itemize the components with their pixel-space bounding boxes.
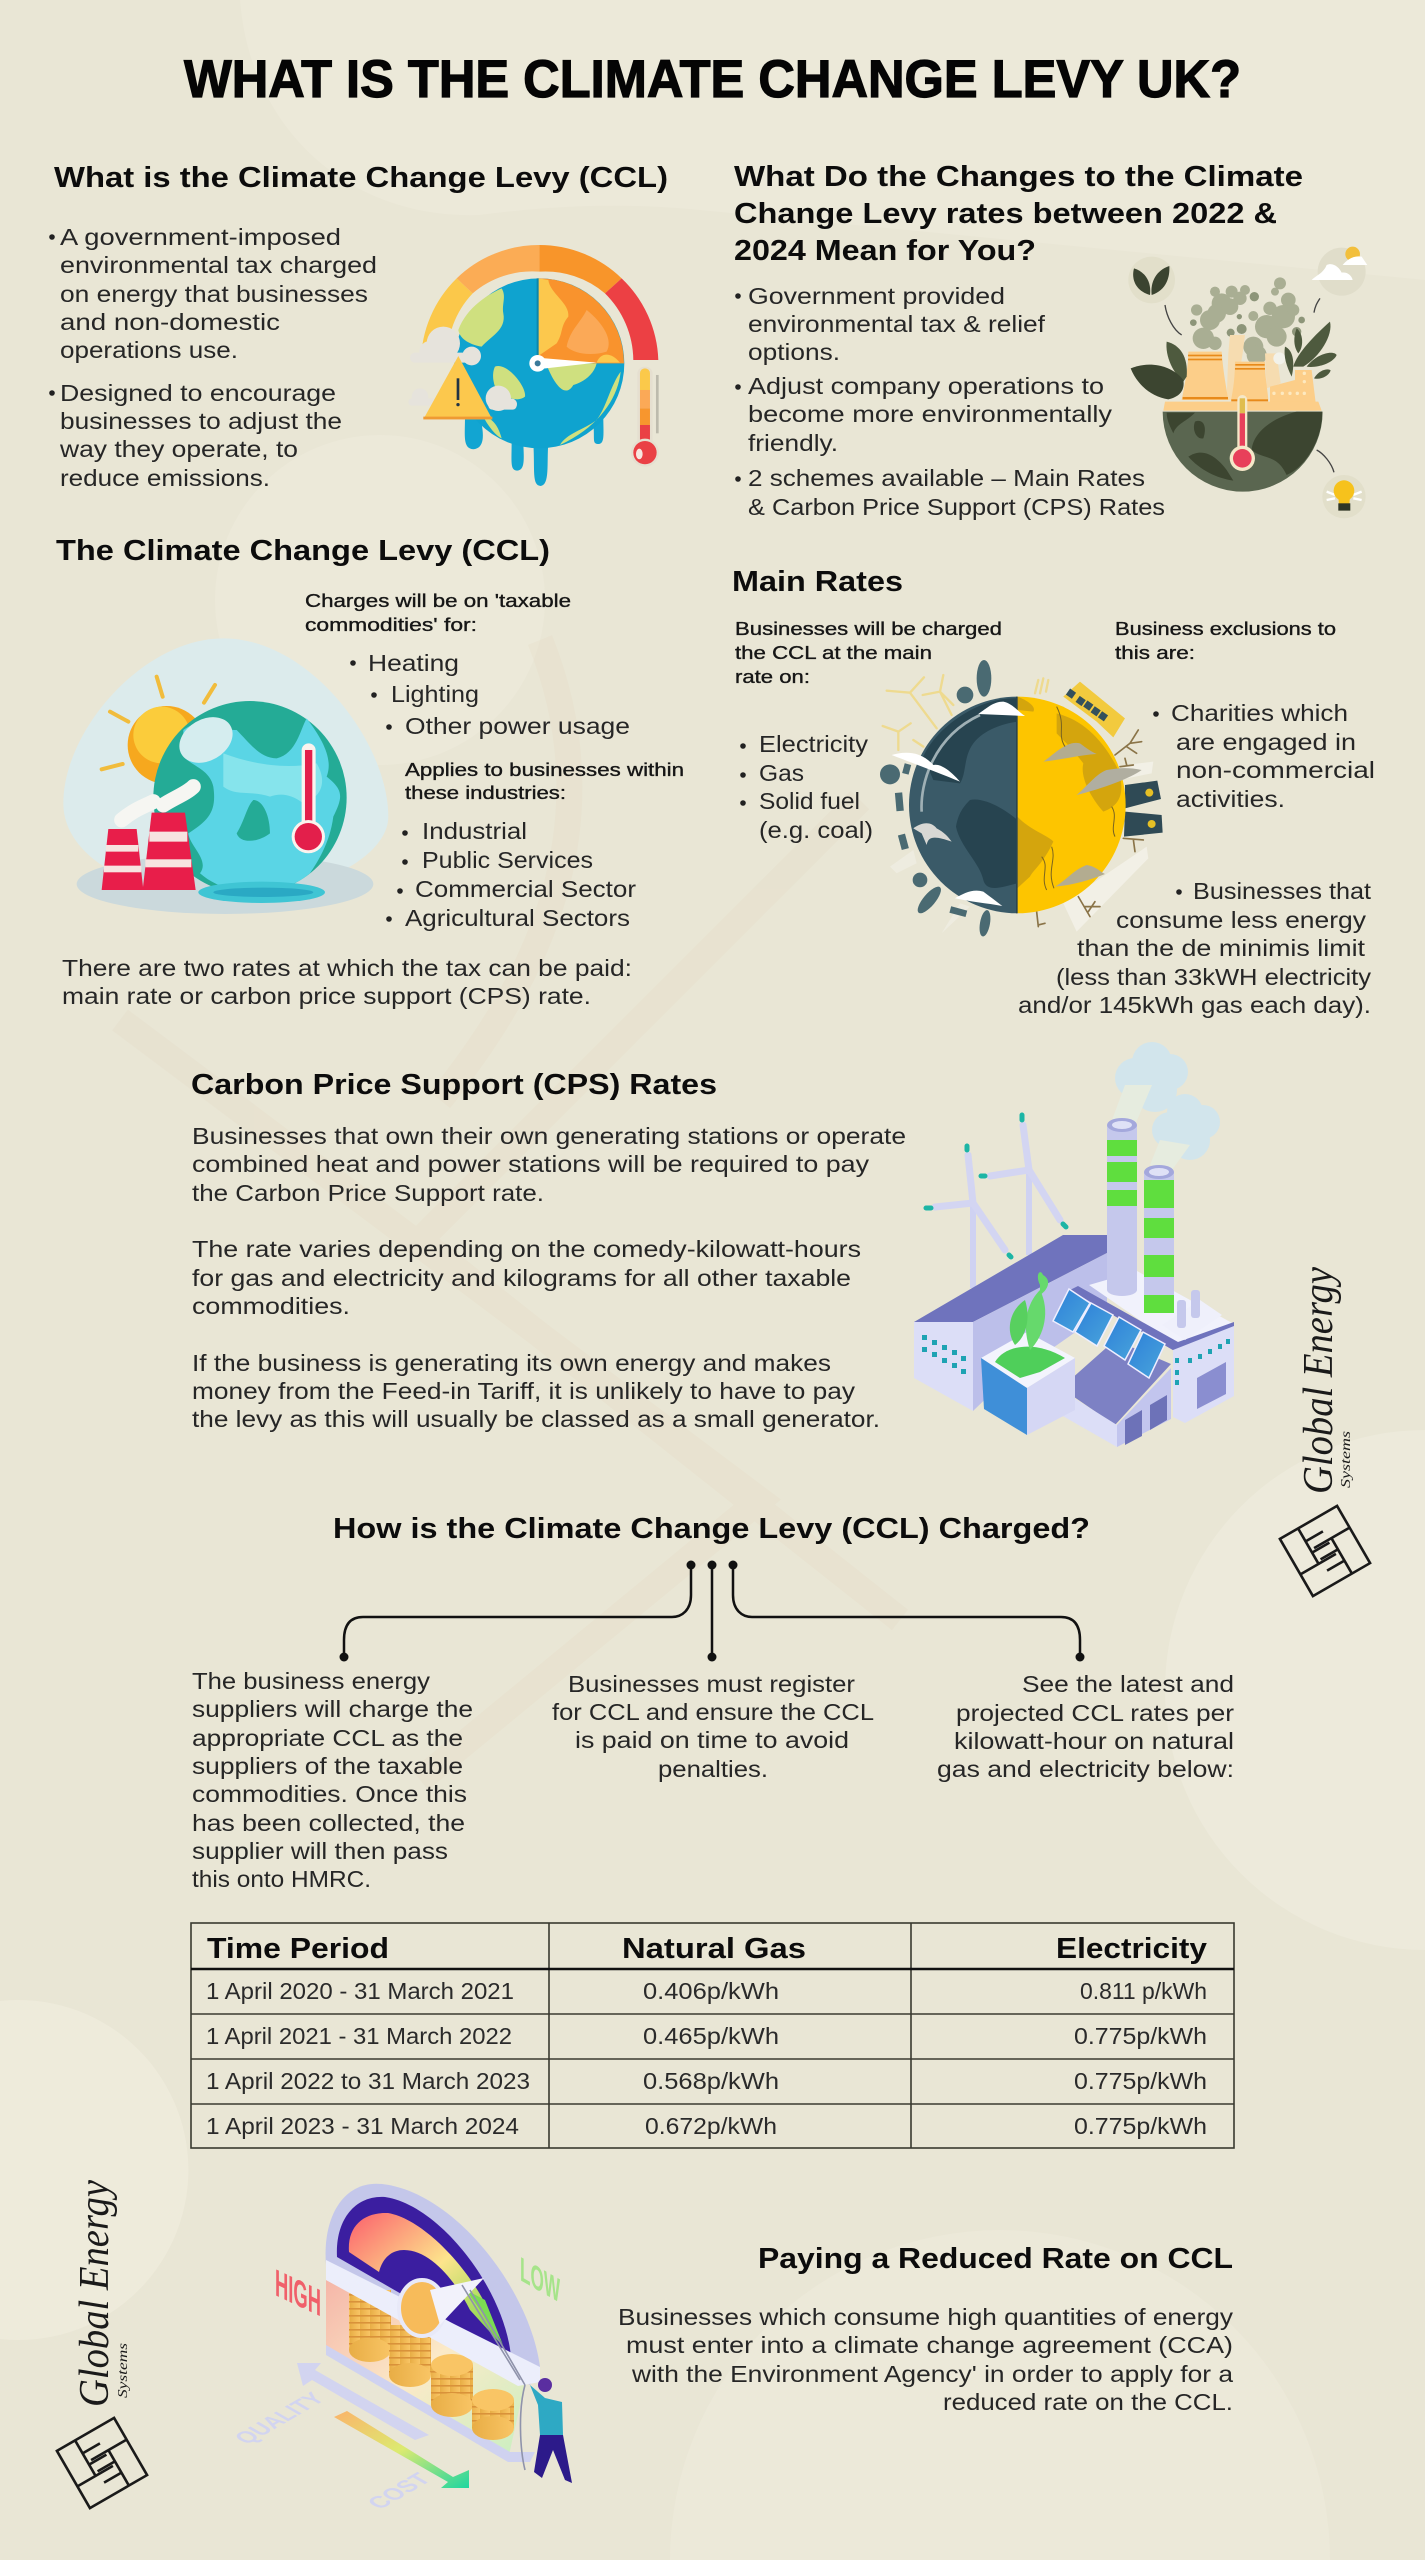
text block: CCL definition bullets: on energy that businesses <box>60 281 368 307</box>
text block: de minimis exclusion: than the de minimis limit <box>1077 935 1366 961</box>
text block: commodities list <box>350 650 630 739</box>
text block: register for CCL: for CCL and ensure the CCL <box>552 1699 874 1725</box>
text block: CPS paragraph one: the Carbon Price Support rate. <box>192 1180 544 1206</box>
text block: see rates below: gas and electricity below: <box>937 1756 1234 1782</box>
panel: carbon price support rates <box>191 1042 1234 1447</box>
icon: cost gauge with coin stacks: HIGH <box>275 2262 321 2325</box>
text block: see rates below: projected CCL rates per <box>956 1700 1234 1726</box>
text block: de minimis exclusion: Businesses that <box>1193 878 1372 904</box>
heading: what do the changes mean: What Do the Changes to the Climate <box>734 161 1303 193</box>
table row 2020-2021 <box>206 1978 1207 2004</box>
text block: CCL definition bullets: environmental tax charged <box>60 252 377 278</box>
text block: suppliers charge CCL: The business energy <box>192 1668 431 1694</box>
text block: taxable commodities subheading: Charges will be on 'taxable <box>305 591 571 611</box>
label: quality: QUALITY <box>229 2389 331 2448</box>
text block: de minimis exclusion <box>1018 878 1372 1018</box>
text block: suppliers charge CCL: has been collected, the <box>192 1810 465 1836</box>
text block: CPS paragraph two: The rate varies depending on the comedy-kilowatt-hours <box>192 1236 861 1262</box>
panel: main rates <box>732 566 1375 1018</box>
text block: CPS paragraph one: combined heat and power stations will be required to pay <box>192 1151 870 1177</box>
text block: charged at main rate on <box>735 619 1002 687</box>
heading: how is the CCL charged: How is the Climate Change Levy (CCL) Charged? <box>333 1513 1090 1545</box>
table header <box>207 1933 1207 1965</box>
text block: changes bullets: & Carbon Price Support (CPS) Rates <box>748 494 1165 520</box>
text block: CCL definition bullets <box>49 224 377 491</box>
text block: CCL definition bullets: reduce emissions. <box>60 465 270 491</box>
heading: what do the changes mean <box>734 161 1303 267</box>
text block: industries list: Public Services <box>422 847 593 873</box>
text block: CCL definition bullets: way they operate, to <box>59 436 298 462</box>
heading: paying a reduced rate: Paying a Reduced Rate on CCL <box>758 2243 1233 2275</box>
logo: right: Systems <box>1339 1430 1354 1488</box>
text block: charities exclusion: Charities which <box>1171 700 1348 726</box>
icon: power plant on half globe <box>1128 247 1367 518</box>
panel: the climate change levy <box>56 535 684 1009</box>
text block: commodities list: Other power usage <box>405 713 630 739</box>
logo: right <box>1280 1267 1370 1596</box>
logo: left: Global Energy <box>72 2180 118 2407</box>
text block: commodities list: Lighting <box>391 681 479 707</box>
heading: CPS rates: Carbon Price Support (CPS) Rates <box>191 1069 717 1101</box>
text block: climate change agreement: reduced rate on the CCL. <box>943 2389 1233 2415</box>
text block: suppliers charge CCL: suppliers of the taxable <box>192 1753 463 1779</box>
text block: de minimis exclusion: (less than 33kWH electricity <box>1056 964 1372 990</box>
text block: changes bullets: environmental tax & relief <box>748 311 1046 337</box>
text block: CPS paragraph three: If the business is generating its own energy and makes <box>192 1350 831 1376</box>
label: low: LOW <box>520 2249 560 2310</box>
text block: CCL definition bullets: A government-imposed <box>60 224 341 250</box>
text block: CPS paragraph one: Businesses that own their own generating stations or operate <box>192 1123 906 1149</box>
icon: melting globe gauge <box>408 245 659 486</box>
heading: the CCL: The Climate Change Levy (CCL) <box>56 535 550 567</box>
text block: suppliers charge CCL: commodities. Once this <box>192 1781 467 1807</box>
table header: Time Period <box>207 1933 389 1965</box>
text block: changes bullets <box>735 283 1165 520</box>
heading: what is the CCL: What is the Climate Change Levy (CCL) <box>54 162 668 194</box>
connector: three branching lines <box>340 1560 1084 1662</box>
table row 2022-2023 <box>206 2068 1207 2094</box>
table row 2020-2021: 0.406p/kWh <box>643 1978 779 2004</box>
panel: how is the CCL charged <box>192 1513 1234 1892</box>
text block: de minimis exclusion: and/or 145kWh gas each day). <box>1018 992 1371 1018</box>
text block: industries list: Industrial <box>422 818 527 844</box>
text block: suppliers charge CCL: supplier will then pass <box>192 1838 448 1864</box>
table header: Natural Gas <box>622 1933 806 1965</box>
text block: suppliers charge CCL: this onto HMRC. <box>192 1866 371 1892</box>
text block: exclusions subheading: Business exclusions to <box>1115 619 1336 639</box>
table header: Electricity <box>1056 1933 1207 1965</box>
icon: melting globe with sun and cooling towers <box>63 638 388 914</box>
text block: register for CCL: Businesses must register <box>568 1671 855 1697</box>
heading: what do the changes mean: 2024 Mean for You? <box>734 235 1036 267</box>
text block: taxable commodities subheading: commodities' for: <box>305 615 477 635</box>
text block: climate change agreement: with the Environment Agency' in order to apply for a <box>631 2361 1233 2387</box>
text block: charged at main rate on: the CCL at the main <box>735 643 932 663</box>
text block: taxable commodities subheading <box>305 591 571 635</box>
text block: fuels list: Electricity <box>759 731 869 757</box>
heading: main rates: Main Rates <box>732 566 903 598</box>
text block: CPS paragraph three: money from the Feed-in Tariff, it is unlikely to have to pay <box>192 1378 856 1404</box>
text block: industries list: Commercial Sector <box>415 876 636 902</box>
table: CCL rates <box>191 1923 1234 2148</box>
text block: CPS paragraph three: the levy as this will usually be classed as a small generator. <box>192 1406 880 1432</box>
text block: changes bullets: options. <box>748 339 840 365</box>
text block: charged at main rate on: Businesses will be charged <box>735 619 1002 639</box>
text block: CPS paragraph three <box>192 1350 880 1432</box>
panel: what is the CCL <box>49 162 668 491</box>
icon: isometric factory with wind turbines <box>914 1042 1234 1447</box>
text block: charities exclusion: activities. <box>1176 786 1285 812</box>
text block: register for CCL <box>552 1671 874 1782</box>
text block: changes bullets: Government provided <box>748 283 1005 309</box>
table row 2022-2023: 1 April 2022 to 31 March 2023 <box>206 2068 530 2094</box>
text block: fuels list <box>740 731 873 843</box>
table row 2021-2022: 1 April 2021 - 31 March 2022 <box>206 2023 512 2049</box>
text block: charities exclusion: are engaged in <box>1176 729 1356 755</box>
table row 2023-2024 <box>206 2113 1207 2139</box>
text block: CCL definition bullets: operations use. <box>60 337 238 363</box>
text block: CPS paragraph two <box>192 1236 861 1319</box>
table row 2023-2024: 1 April 2023 - 31 March 2024 <box>206 2113 519 2139</box>
text block: fuels list: Gas <box>759 760 804 786</box>
logo: left: Systems <box>116 2342 131 2398</box>
text block: industries list: Agricultural Sectors <box>405 905 630 931</box>
text block: climate change agreement: must enter into a climate change agreement (CCA) <box>626 2332 1233 2358</box>
text block: climate change agreement <box>618 2304 1234 2415</box>
table row 2020-2021: 0.811 p/kWh <box>1080 1978 1207 2004</box>
panel: changes to the rates <box>734 161 1367 520</box>
text block: suppliers charge CCL: appropriate CCL as the <box>192 1725 463 1751</box>
text block: see rates below <box>937 1671 1234 1782</box>
text block: industries subheading: these industries: <box>405 783 566 803</box>
text block: exclusions subheading: this are: <box>1115 643 1195 663</box>
text block: CPS paragraph two: commodities. <box>192 1293 350 1319</box>
text block: CCL definition bullets: Designed to encourage <box>60 380 336 406</box>
text block: charities exclusion <box>1153 700 1375 812</box>
text block: see rates below: See the latest and <box>1022 1671 1234 1697</box>
text block: see rates below: kilowatt-hour on natural <box>954 1728 1234 1754</box>
title: WHAT IS THE CLIMATE CHANGE LEVY UK? <box>184 50 1241 109</box>
text block: commodities list: Heating <box>368 650 459 676</box>
table row 2021-2022: 0.775p/kWh <box>1074 2023 1207 2049</box>
text block: changes bullets: Adjust company operations to <box>748 373 1104 399</box>
text block: register for CCL: penalties. <box>658 1756 768 1782</box>
table row 2023-2024: 0.672p/kWh <box>645 2113 777 2139</box>
label: cost: COST <box>362 2469 437 2513</box>
text block: CCL definition bullets: businesses to adjust the <box>60 408 342 434</box>
text block: charities exclusion: non-commercial <box>1176 757 1375 783</box>
text block: two rates note <box>62 955 632 1009</box>
text block: fuels list: (e.g. coal) <box>759 817 873 843</box>
text block: fuels list: Solid fuel <box>759 788 860 814</box>
text block: industries subheading: Applies to businesses within <box>405 760 684 780</box>
text block: charged at main rate on: rate on: <box>735 667 810 687</box>
text block: suppliers charge CCL: suppliers will charge the <box>192 1696 473 1722</box>
table row 2021-2022 <box>206 2023 1207 2049</box>
text block: changes bullets: become more environmentally <box>748 401 1113 427</box>
text block: two rates note: main rate or carbon price support (CPS) rate. <box>62 983 591 1009</box>
text block: suppliers charge CCL <box>192 1668 473 1892</box>
icon: cost gauge with coin stacks <box>229 2184 572 2513</box>
text block: climate change agreement: Businesses which consume high quantities of energy <box>618 2304 1234 2330</box>
text block: industries subheading <box>405 760 684 803</box>
table row 2020-2021: 1 April 2020 - 31 March 2021 <box>206 1978 514 2004</box>
text block: industries list <box>386 818 636 931</box>
text block: two rates note: There are two rates at which the tax can be paid: <box>62 955 632 981</box>
text block: CPS paragraph two: for gas and electricity and kilograms for all other taxable <box>192 1265 851 1291</box>
logo: right: Global Energy <box>1296 1267 1342 1494</box>
text block: changes bullets: 2 schemes available – Main Rates <box>748 465 1145 491</box>
text block: CCL definition bullets: and non-domestic <box>60 309 280 335</box>
text block: changes bullets: friendly. <box>748 430 838 456</box>
table row 2022-2023: 0.568p/kWh <box>643 2068 779 2094</box>
text block: de minimis exclusion: consume less energy <box>1116 907 1367 933</box>
table row 2023-2024: 0.775p/kWh <box>1074 2113 1207 2139</box>
text block: exclusions subheading <box>1115 619 1336 663</box>
text block: register for CCL: is paid on time to avoid <box>575 1727 849 1753</box>
logo: left <box>57 2180 147 2508</box>
table row 2021-2022: 0.465p/kWh <box>643 2023 779 2049</box>
heading: what do the changes mean: Change Levy rates between 2022 & <box>734 198 1277 230</box>
panel: paying a reduced rate <box>618 2243 1234 2415</box>
text block: CPS paragraph one <box>192 1123 906 1206</box>
icon: half dark half yellow earth <box>880 660 1163 937</box>
table row 2022-2023: 0.775p/kWh <box>1074 2068 1207 2094</box>
